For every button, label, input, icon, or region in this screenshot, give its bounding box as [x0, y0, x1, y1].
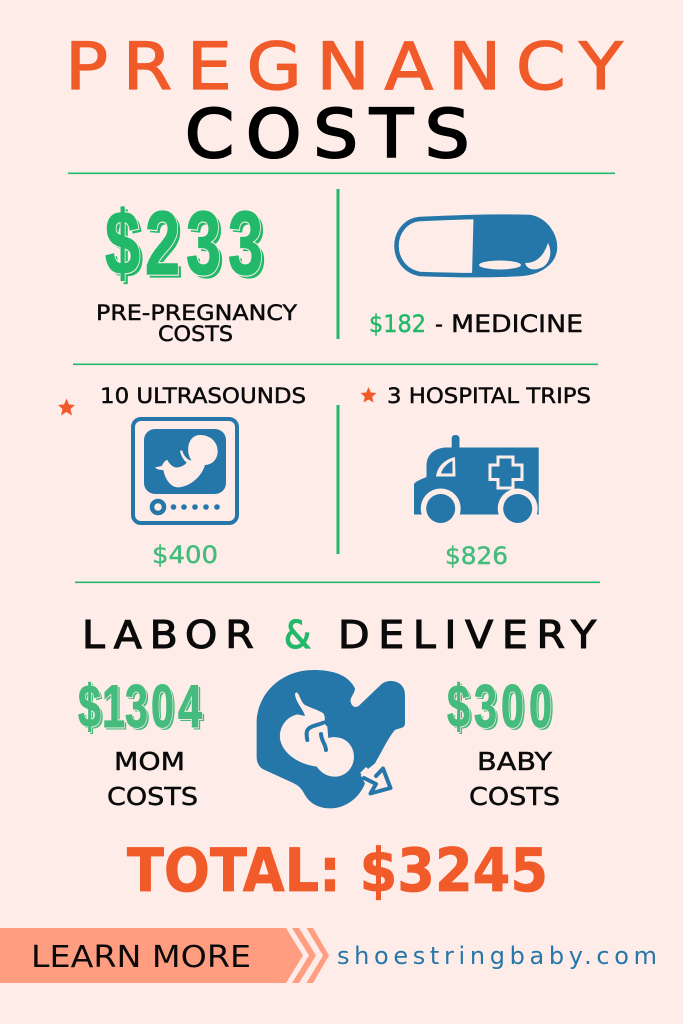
banner: learn more: LEARN MORE	[31, 940, 251, 975]
amount: $1304: 4	[178, 673, 202, 740]
panel: medicine	[369, 216, 583, 338]
amount: $1304: $	[78, 673, 101, 740]
amount: $300: 3	[474, 673, 497, 740]
amount: $233: 3	[186, 194, 221, 294]
heading: labor and delivery: &	[284, 613, 311, 657]
title: PREGNANCY	[65, 30, 623, 105]
label: pre-pregnancy costs: PRE-PREGNANCY	[96, 301, 297, 325]
amount: $300: 0	[529, 673, 552, 740]
label: 10 ultrasounds: 10 ULTRASOUNDS	[100, 384, 306, 408]
title: COSTS	[185, 96, 470, 174]
amount: $300	[447, 673, 554, 742]
amount: $300: $	[447, 673, 470, 740]
icon: star	[58, 398, 75, 416]
amount: $233: $	[108, 197, 143, 297]
amount: $1304: 3	[125, 673, 148, 740]
label: $182 medicine	[369, 310, 583, 338]
amount: $1304: 1	[102, 673, 125, 740]
amount: $1304: 1	[102, 673, 125, 740]
amount: $1304: 0	[151, 673, 174, 740]
amount: $233: 2	[145, 194, 180, 294]
title	[65, 30, 623, 174]
panel: pre-pregnancy costs	[96, 194, 297, 346]
panel: ultrasounds	[58, 384, 306, 569]
amount: $233: 2	[145, 194, 180, 294]
amount: $1304: 4	[180, 675, 204, 742]
amount: $1304: 4	[178, 673, 202, 740]
panel: hospital trips	[360, 384, 591, 570]
amount: $300: 0	[531, 675, 554, 742]
website url: shoestringbaby.com	[337, 942, 657, 970]
total: TOTAL: $3245	[127, 836, 548, 906]
amount: $1304	[78, 673, 204, 742]
amount: $300: $	[449, 675, 472, 742]
panel: baby costs	[447, 673, 560, 811]
panel: mom costs	[78, 673, 204, 811]
label: pre-pregnancy costs	[96, 301, 297, 346]
label: pre-pregnancy costs: COSTS	[158, 322, 233, 346]
label: mom costs: COSTS	[107, 782, 198, 811]
amount: $233: 2	[148, 197, 183, 297]
heading: labor and delivery: LABOR	[82, 613, 254, 658]
amount: $233: $	[105, 194, 140, 294]
label: mom costs	[107, 747, 198, 811]
label: $182 medicine: -	[435, 310, 443, 338]
icon: ultrasound monitor	[133, 419, 237, 523]
heading: labor and delivery: DELIVERY	[338, 613, 597, 658]
label: baby costs	[469, 747, 560, 811]
label: $182 medicine: $182	[369, 310, 426, 338]
amount: $300: 3	[474, 673, 497, 740]
amount: $233: 3	[189, 197, 224, 297]
amount: $233: 3	[228, 194, 263, 294]
amount: $233: 3	[228, 194, 263, 294]
amount: $1304: 1	[104, 675, 127, 742]
amount: $300: 0	[501, 673, 524, 740]
amount: $233: 3	[231, 197, 266, 297]
heading: labor and delivery	[82, 613, 597, 658]
amount: $1304: $	[78, 673, 101, 740]
amount: $300: $	[447, 673, 470, 740]
icon: downward arrow	[360, 767, 390, 794]
label: baby costs: COSTS	[469, 782, 560, 811]
amount: $1304: 0	[151, 673, 174, 740]
icon: star	[360, 387, 376, 402]
label: 3 hospital trips: 3 HOSPITAL TRIPS	[387, 384, 591, 408]
amount: $1304: 3	[127, 675, 150, 742]
amount: $1304: $	[80, 675, 103, 742]
amount: $233: 3	[186, 194, 221, 294]
label: $182 medicine: MEDICINE	[451, 310, 583, 338]
amount: $300: 3	[476, 675, 499, 742]
amount: $1304: 0	[153, 675, 176, 742]
banner: learn more	[0, 928, 329, 983]
label: baby costs: BABY	[477, 747, 553, 776]
icon: pill capsule	[396, 216, 557, 277]
value: $826: $826	[445, 542, 508, 570]
amount: $300: 0	[503, 675, 526, 742]
amount: $300: 0	[529, 673, 552, 740]
amount: $233	[105, 194, 266, 297]
label: mom costs: MOM	[114, 747, 185, 776]
amount: $300: 0	[501, 673, 524, 740]
icon: ambulance	[414, 435, 539, 528]
amount: $1304: 3	[125, 673, 148, 740]
value: $400: $400	[152, 541, 218, 569]
icon: fetus in womb	[257, 670, 405, 808]
amount: $233: $	[105, 194, 140, 294]
